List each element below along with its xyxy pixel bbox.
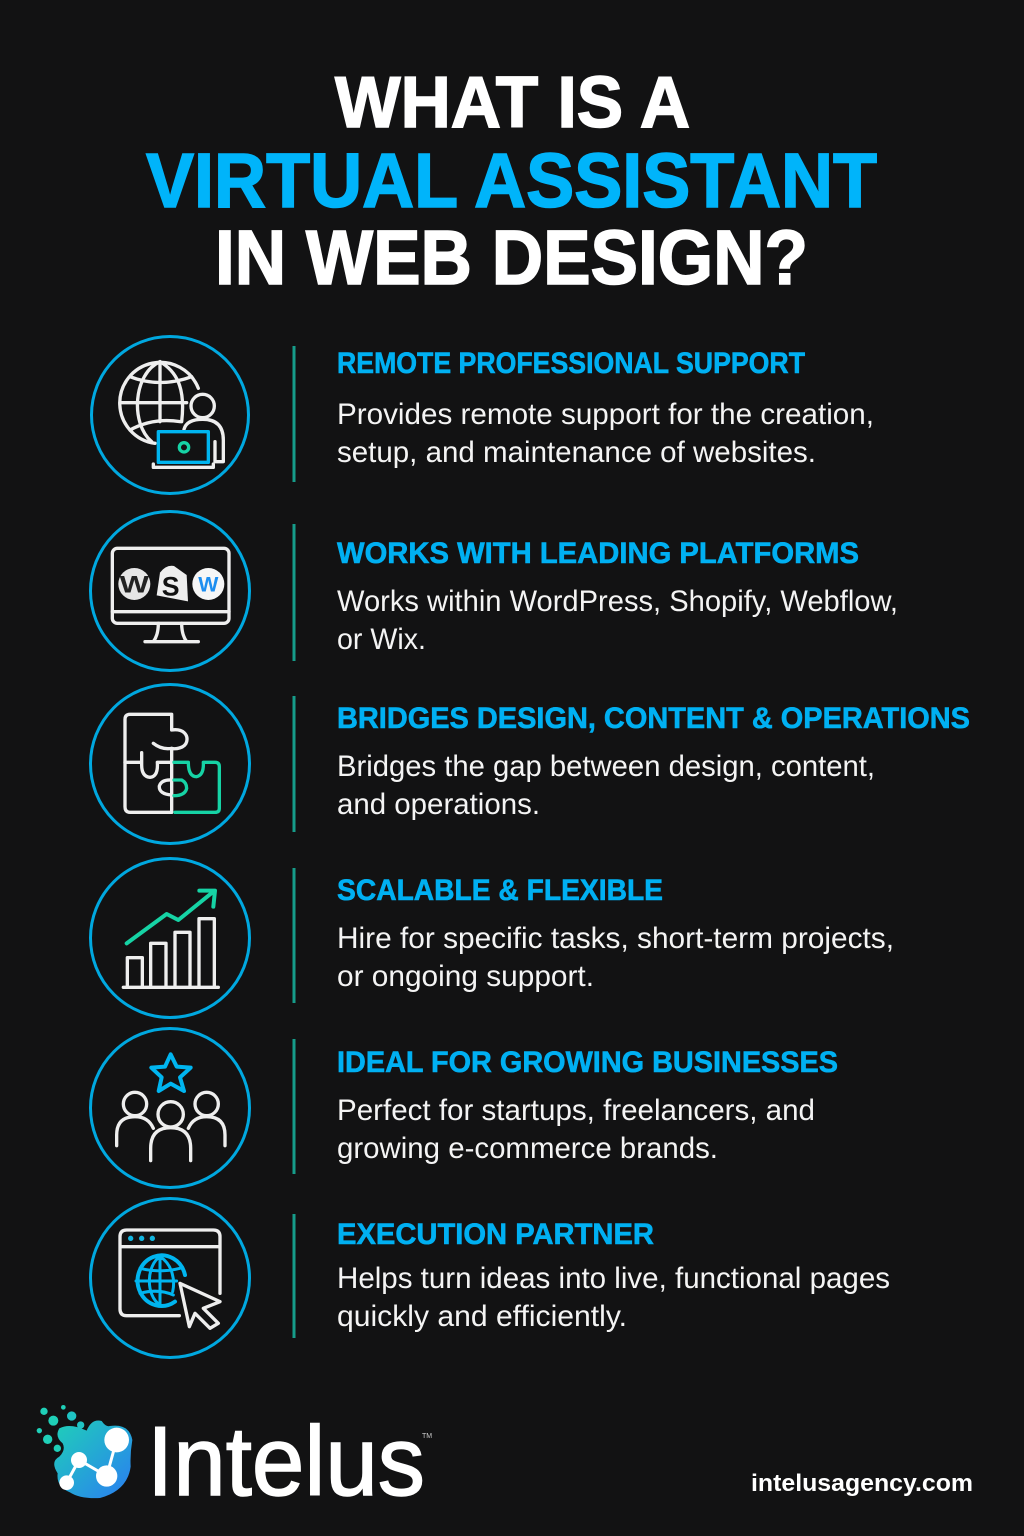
icon: browser window with globe and cursor [90,1198,250,1358]
title: IN WEB DESIGN? [215,215,808,301]
row: remote professional support [92,336,874,494]
website url: intelusagency.com [751,1470,973,1497]
body text [337,750,875,821]
body text [337,398,874,469]
row: works with leading platforms [90,512,898,670]
title: WHAT IS A [335,63,690,143]
body text: Helps turn ideas into live, functional pages [337,1262,890,1295]
icon: growth bar chart [90,858,250,1018]
body text [337,585,898,656]
icon: globe, person and laptop [92,336,248,494]
heading: REMOTE PROFESSIONAL SUPPORT [337,347,805,380]
divider [292,346,296,482]
body text: Bridges the gap between design, content, [337,750,875,783]
heading: WORKS WITH LEADING PLATFORMS [337,537,859,570]
icon: monitor with platform logos [90,512,250,670]
logo wordmark: Intelus [147,1406,425,1516]
icon: puzzle pieces [90,684,250,844]
heading: IDEAL FOR GROWING BUSINESSES [337,1046,838,1079]
body text: quickly and efficiently. [337,1300,627,1333]
divider [292,1214,296,1338]
body text: Provides remote support for the creation, [337,398,874,431]
body text: growing e-commerce brands. [337,1132,718,1165]
body text: Perfect for startups, freelancers, and [337,1094,815,1127]
body text [337,922,894,993]
title [146,63,877,301]
row: execution partner [90,1198,890,1358]
row: bridges design, content and operations [90,684,970,844]
body text: and operations. [337,788,540,821]
icon: monitor with platform logos: S [162,571,180,601]
icon: monitor with platform logos: W [198,573,219,597]
logo: Intelus [37,1405,432,1516]
divider [292,524,296,661]
body text: Hire for specific tasks, short-term projects, [337,922,894,955]
trademark: TM [422,1433,432,1440]
heading: SCALABLE & FLEXIBLE [337,874,663,907]
logo mark [37,1405,132,1498]
row: scalable and flexible [90,858,894,1018]
divider [292,868,296,1003]
row: ideal for growing businesses [90,1028,838,1188]
body text: Works within WordPress, Shopify, Webflow, [337,585,898,618]
title: VIRTUAL ASSISTANT [146,138,877,224]
body text: setup, and maintenance of websites. [337,436,816,469]
heading: BRIDGES DESIGN, CONTENT & OPERATIONS [337,702,970,735]
heading: EXECUTION PARTNER [337,1218,654,1251]
body text: or ongoing support. [337,960,594,993]
body text: or Wix. [337,623,426,656]
icon: monitor with platform logos: W [120,572,149,599]
body text [337,1094,815,1165]
divider [292,696,296,832]
body text [337,1262,890,1333]
icon: team with star [90,1028,250,1188]
divider [292,1039,296,1174]
